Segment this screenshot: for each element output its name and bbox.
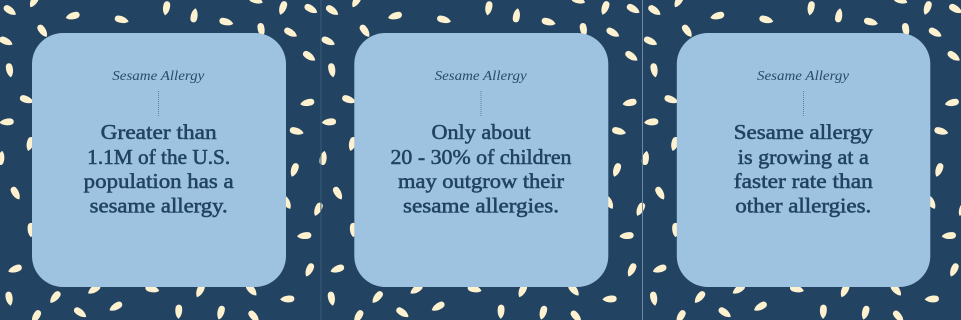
panel: fact 3	[677, 33, 930, 287]
fact text 3: faster rate than	[734, 169, 873, 193]
fact text 3: Sesame allergy	[734, 120, 873, 144]
fact text 1: population has a	[84, 169, 234, 193]
fact text 1: sesame allergy.	[90, 194, 228, 218]
fact text 2: Only about	[432, 120, 531, 144]
fact text 2	[390, 120, 572, 218]
fact text 3	[734, 120, 873, 218]
panel: fact 2	[354, 33, 608, 287]
seed pattern: panel 2	[319, 0, 646, 320]
eyebrow label 2: Sesame Allergy	[435, 69, 527, 84]
dotted connector 2	[480, 91, 482, 117]
card 3	[677, 33, 930, 287]
eyebrow label 3: Sesame Allergy	[757, 69, 850, 84]
seed pattern: panel 3	[641, 0, 961, 320]
fact text 2: 20 - 30% of children	[390, 145, 572, 169]
panel: fact 1	[32, 33, 286, 287]
card 1	[32, 33, 286, 287]
dotted connector 3	[802, 91, 804, 117]
fact text 1	[84, 120, 234, 218]
dotted connector 1	[158, 91, 160, 117]
fact text 1: Greater than	[101, 120, 217, 144]
eyebrow label 1: Sesame Allergy	[112, 69, 205, 84]
fact text 2: may outgrow their	[398, 169, 564, 193]
card 2	[354, 33, 608, 287]
fact text 3: is growing at a	[738, 145, 870, 169]
fact text 3: other allergies.	[735, 194, 871, 218]
seed pattern: panel 1	[0, 0, 324, 320]
fact text 2: sesame allergies.	[403, 194, 559, 218]
fact text 1: 1.1M of the U.S.	[87, 145, 230, 169]
